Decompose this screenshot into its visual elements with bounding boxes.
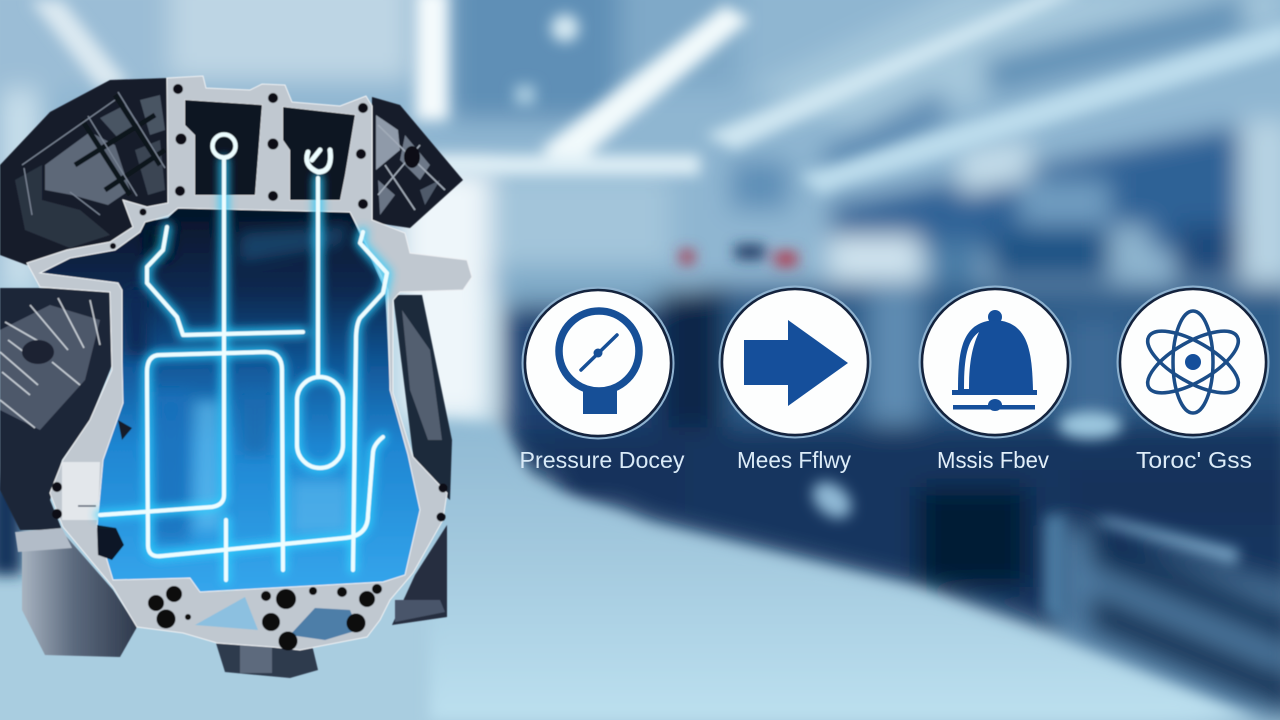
bottom castings (215, 640, 318, 678)
interior cavity (40, 208, 420, 592)
silver casting frame (27, 76, 472, 650)
label: pressure decay: Pressure Docey (520, 447, 685, 473)
red accents (680, 250, 694, 264)
bottom oil galleries (148, 584, 382, 650)
upper chamber windows (185, 100, 355, 200)
floor-level machinery (500, 420, 1280, 720)
light wall next to engine (400, 170, 490, 420)
right cylinder bank (370, 97, 463, 228)
dark spot on left (0, 480, 22, 575)
icon: bell (920, 286, 1070, 438)
label: tracer gas: Toroc' Gss (1136, 447, 1252, 473)
left cylinder bank (0, 78, 170, 270)
label: mass flow: Mees Fflwy (737, 447, 851, 473)
ceiling light streaks (540, 5, 750, 165)
lower right crankcase (392, 295, 452, 625)
solid block at left wall (62, 420, 132, 560)
middle dark band (505, 305, 705, 435)
bottom cutouts (195, 597, 358, 640)
icon: flow arrow (720, 286, 870, 438)
engine block cutaway (0, 76, 472, 678)
interior depth shading (125, 225, 350, 542)
lower left crankcase (0, 288, 137, 657)
icon: atom (1118, 286, 1268, 438)
label: mass flow second: Mssis Fbev (937, 447, 1049, 473)
bolt holes top (52, 84, 448, 522)
icon: pressure gauge (522, 288, 674, 438)
highlights (1090, 518, 1240, 565)
floor (430, 420, 1260, 720)
glowing coolant channels: halo (100, 160, 387, 580)
glowing coolant channels: core (100, 134, 387, 580)
ceiling base (0, 0, 1280, 290)
